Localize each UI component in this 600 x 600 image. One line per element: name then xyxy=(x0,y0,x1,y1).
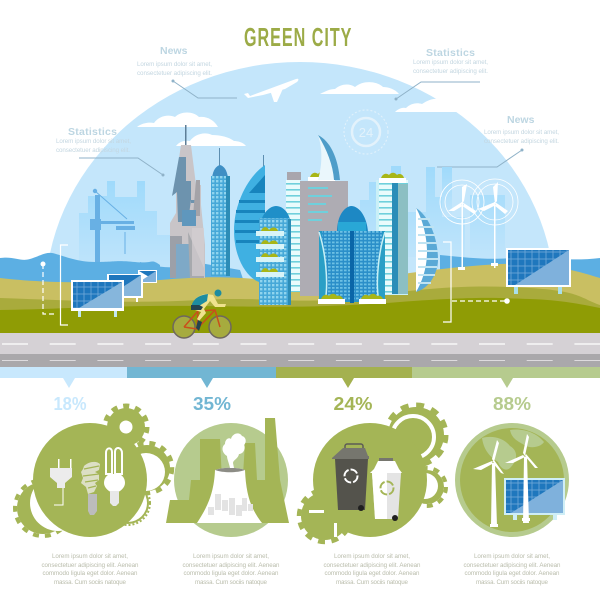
icon: wind turbine left xyxy=(473,440,504,527)
text block 3: commodo ligula eget dolor. Aenean xyxy=(324,570,420,577)
text block 3: consectetuer adipiscing elit. Aenean xyxy=(324,562,421,569)
text block 4 xyxy=(464,553,561,586)
panel: energy saving xyxy=(15,406,172,537)
text block 2: Lorem ipsum dolor sit amet, xyxy=(193,553,269,560)
cyclist xyxy=(173,290,231,338)
callout: statistics right: Lorem ipsum dolor sit amet, xyxy=(413,59,488,66)
callout: news right xyxy=(437,114,559,167)
icon: 24 hour clock xyxy=(344,110,388,154)
percent 24: 24% xyxy=(334,394,372,414)
percent 35: 35% xyxy=(193,394,231,414)
solar panels left xyxy=(71,270,157,317)
callout: statistics right xyxy=(394,47,488,100)
tower: front blue building xyxy=(318,206,386,304)
bracket and marker left xyxy=(40,245,68,325)
crane xyxy=(90,189,135,263)
text block 1: massa. Cum sociis natoque xyxy=(54,579,127,586)
icon: plug xyxy=(50,459,72,505)
text block 4: consectetuer adipiscing elit. Aenean xyxy=(464,562,561,569)
text block 1: Lorem ipsum dolor sit amet, xyxy=(52,553,128,560)
callout: statistics left xyxy=(56,126,164,176)
percent 88: 88% xyxy=(493,394,531,414)
text block 3: Lorem ipsum dolor sit amet, xyxy=(334,553,410,560)
hills xyxy=(0,253,600,340)
text block 3: massa. Cum sociis natoque xyxy=(336,579,409,586)
tower: sail shaped blue xyxy=(234,155,265,282)
text block 4: massa. Cum sociis natoque xyxy=(476,579,549,586)
icon: dark bin xyxy=(332,444,369,511)
callout: news right: News xyxy=(507,114,535,126)
panel: power plant xyxy=(166,418,289,537)
title: GREEN CITY xyxy=(244,22,352,52)
tower: terraced green building xyxy=(256,206,291,305)
icon: airplane xyxy=(244,79,298,102)
text block 4: Lorem ipsum dolor sit amet, xyxy=(474,553,550,560)
background skyline left xyxy=(79,181,171,275)
icon: cooling tower xyxy=(197,433,262,523)
wind turbines xyxy=(440,179,518,270)
text block 2: consectetuer adipiscing elit. Aenean xyxy=(182,562,280,569)
sky dome xyxy=(50,62,549,279)
panel: recycling xyxy=(299,405,446,542)
icon: spiral bulb xyxy=(81,462,100,515)
callout: news right: Lorem ipsum dolor sit amet, xyxy=(484,129,559,136)
callout: statistics left: Statistics xyxy=(68,126,117,138)
callout: statistics right: consectetuer adipiscing elit. xyxy=(413,68,488,75)
callout: statistics left: Lorem ipsum dolor sit amet, xyxy=(56,138,131,145)
icon: wind turbine right xyxy=(505,434,538,523)
text block 3 xyxy=(324,553,421,586)
text block 1 xyxy=(42,553,139,586)
tower: twisted grey skyscraper xyxy=(170,125,205,278)
icon: tube bulb xyxy=(104,448,125,506)
text block 2: massa. Cum sociis natoque xyxy=(195,579,268,586)
tower: small white sail xyxy=(416,208,438,292)
icon: white bin xyxy=(370,458,402,521)
callout: news left: News xyxy=(160,45,188,57)
text block 1: consectetuer adipiscing elit. Aenean xyxy=(42,562,139,569)
callout: statistics right: Statistics xyxy=(426,47,475,59)
callout: statistics left: consectetuer adipiscing elit. xyxy=(56,147,130,154)
solar panel right xyxy=(506,248,571,294)
callout: news left xyxy=(137,45,237,98)
background skyline right xyxy=(360,166,505,265)
text block 2: commodo ligula eget dolor. Aenean xyxy=(184,570,279,577)
road xyxy=(0,333,600,367)
text block 4: commodo ligula eget dolor. Aenean xyxy=(464,570,560,577)
clouds xyxy=(137,82,459,146)
colour band xyxy=(0,367,600,388)
bracket and marker right xyxy=(443,242,510,322)
percent 18: 18% xyxy=(54,394,86,414)
text block 2 xyxy=(182,553,280,586)
tower: white sail rooftop xyxy=(318,135,340,180)
tower: grey and white block xyxy=(286,172,348,296)
tower: cyan glass xyxy=(376,173,408,295)
callout: news left: consectetuer adipiscing elit. xyxy=(137,70,212,77)
text block 1: commodo ligula eget dolor. Aenean xyxy=(42,570,138,577)
callout: news right: consectetuer adipiscing elit. xyxy=(484,138,559,145)
tower: blue cylinder xyxy=(211,148,230,276)
icon: 24 hour clock: 24 xyxy=(359,125,373,140)
callout: news left: Lorem ipsum dolor sit amet, xyxy=(137,61,212,68)
icon: solar panel xyxy=(504,478,565,520)
panel: renewable energy globe xyxy=(455,423,569,537)
